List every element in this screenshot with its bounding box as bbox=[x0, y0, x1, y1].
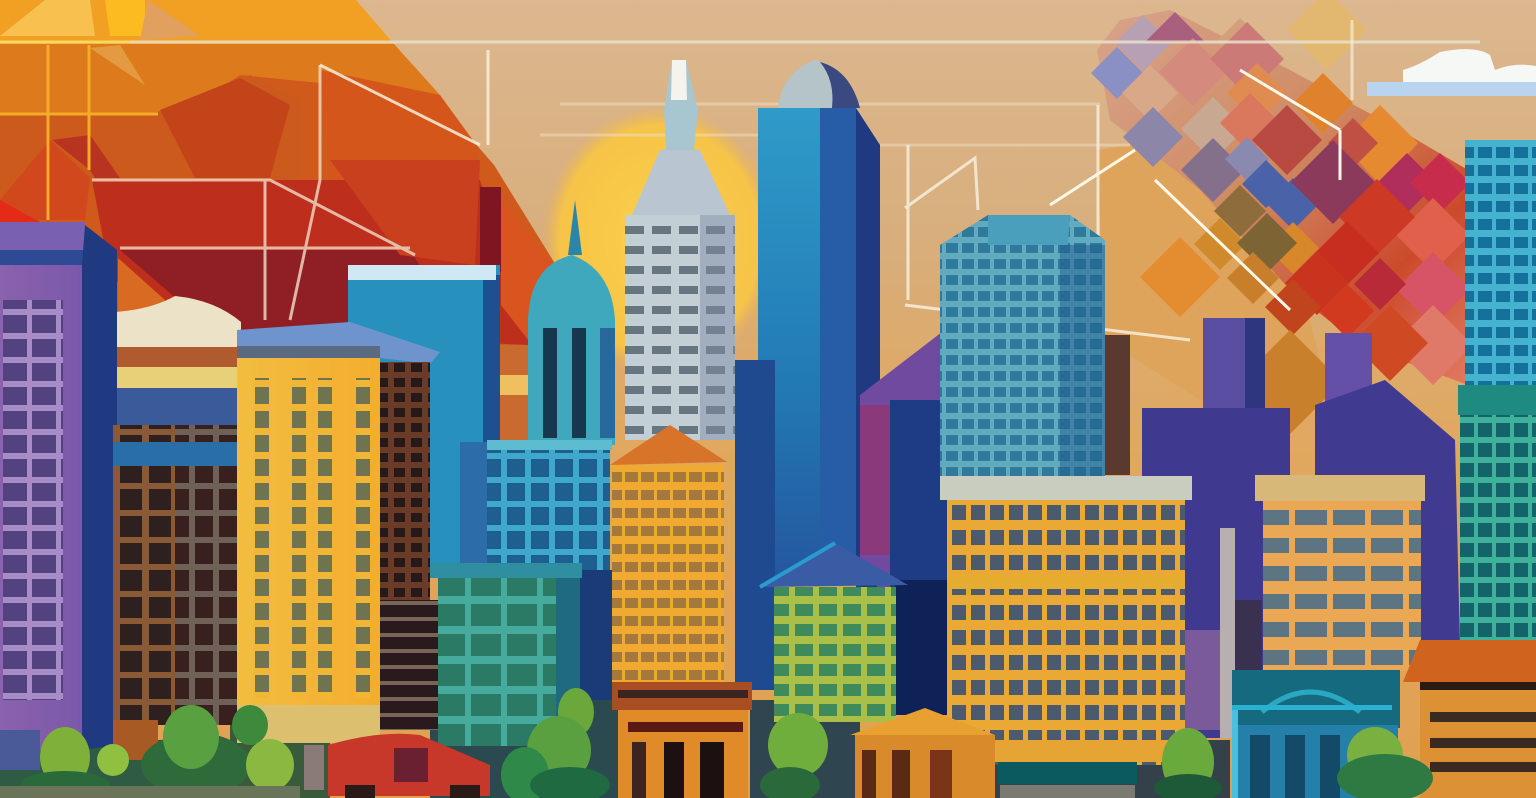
yellow and blue horizon strip bbox=[113, 347, 238, 428]
cloud, behind left buildings bbox=[113, 296, 241, 347]
far purple building, centre bbox=[860, 332, 950, 715]
red vehicle bbox=[328, 734, 490, 798]
mid blue building bbox=[460, 440, 614, 700]
faceted orange mountain, upper left bbox=[0, 0, 562, 350]
silver spire tower bbox=[625, 60, 735, 440]
purple towers, right bbox=[1142, 318, 1460, 738]
faceted diamond mosaic, upper right bbox=[1091, 0, 1473, 434]
far right teal towers bbox=[1458, 140, 1536, 643]
brown building bbox=[113, 425, 238, 760]
tall blue tower bbox=[735, 60, 880, 690]
tan building bbox=[1255, 475, 1425, 671]
teal temple bbox=[1232, 670, 1400, 798]
orange temple, right of centre bbox=[850, 708, 995, 798]
sun behind towers bbox=[542, 105, 778, 375]
dark street base bbox=[0, 700, 1230, 798]
trees bbox=[0, 688, 1433, 798]
teal glass tower bbox=[940, 215, 1130, 480]
large gold building bbox=[940, 476, 1192, 784]
lime building with blue roof bbox=[760, 543, 908, 722]
teal domed tower bbox=[528, 200, 615, 445]
orange gabled building bbox=[610, 425, 727, 690]
yellow building bbox=[237, 322, 440, 743]
background blue building bbox=[348, 265, 528, 575]
cloud, upper right bbox=[1367, 49, 1536, 96]
orange temple, centre bbox=[612, 682, 752, 798]
thin grid and network lines bbox=[0, 20, 1480, 400]
left purple building bbox=[0, 222, 117, 770]
orange striped building, lower right bbox=[1403, 640, 1536, 798]
green teal building bbox=[430, 563, 582, 746]
